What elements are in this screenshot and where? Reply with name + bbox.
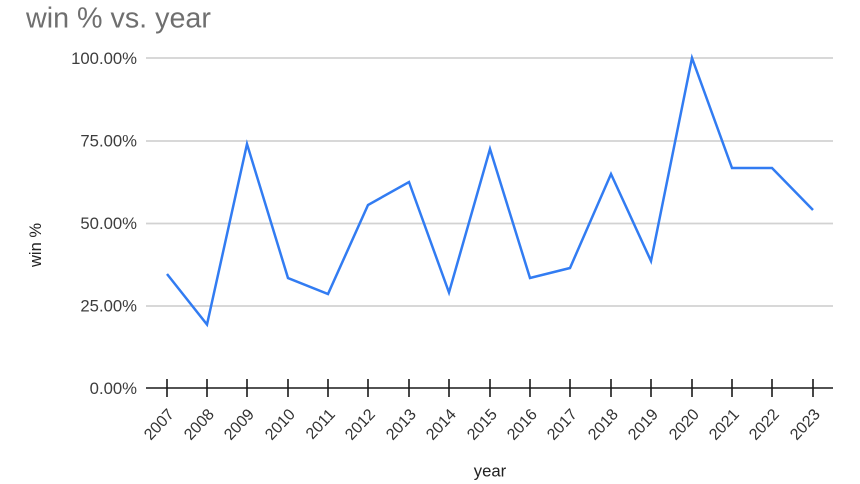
x axis labels: 2013 bbox=[383, 406, 420, 444]
y axis labels bbox=[71, 49, 137, 398]
x axis labels: 2011 bbox=[303, 406, 339, 443]
x axis labels: 2010 bbox=[262, 406, 299, 444]
y axis title: win % bbox=[27, 223, 45, 268]
x axis labels: 2012 bbox=[342, 406, 379, 444]
x axis labels: 2007 bbox=[141, 406, 178, 444]
y axis labels: 100.00% bbox=[71, 49, 137, 68]
x axis labels: 2021 bbox=[706, 406, 743, 444]
x axis labels: 2019 bbox=[625, 406, 662, 444]
x axis bbox=[146, 379, 833, 397]
data line: win % by year bbox=[167, 58, 813, 324]
x axis labels: 2008 bbox=[181, 406, 218, 444]
x axis labels: 2014 bbox=[423, 406, 460, 444]
x axis labels: 2015 bbox=[464, 406, 501, 444]
x axis labels: 2020 bbox=[666, 406, 703, 444]
y axis labels: 50.00% bbox=[80, 214, 137, 233]
x axis labels: 2018 bbox=[585, 406, 622, 444]
y axis labels: 25.00% bbox=[80, 296, 137, 316]
x axis labels: 2017 bbox=[544, 406, 581, 444]
title: win % vs. year bbox=[25, 2, 211, 34]
y axis labels: 0.00% bbox=[90, 379, 137, 398]
y axis labels: 75.00% bbox=[80, 132, 137, 150]
x axis labels: 2023 bbox=[787, 406, 824, 444]
x axis labels bbox=[141, 406, 824, 444]
x axis labels: 2009 bbox=[221, 406, 258, 444]
x axis title: year bbox=[474, 462, 507, 480]
x axis labels: 2016 bbox=[504, 406, 541, 444]
x axis labels: 2022 bbox=[746, 406, 783, 444]
